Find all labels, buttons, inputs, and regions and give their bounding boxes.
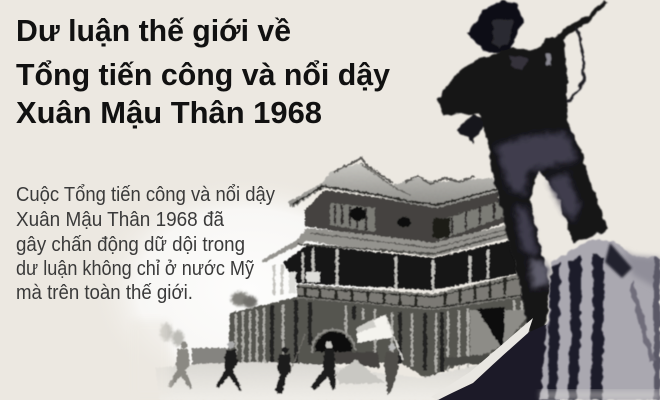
- balustrade: [297, 274, 523, 310]
- fade of photo into background at left: [130, 320, 170, 400]
- shirt highlight: [510, 55, 528, 70]
- dark doorway on right: [477, 307, 505, 350]
- distant trees: [160, 292, 257, 346]
- light opening between columns: [289, 272, 320, 293]
- soldier 4: [311, 342, 336, 390]
- soldier statue: [438, 0, 608, 347]
- ground: [155, 360, 500, 400]
- central arched gate: [315, 332, 352, 352]
- rifle stock: [457, 113, 487, 142]
- photo: Ngo Mon palace gate: [155, 158, 533, 400]
- intro paragraph: gây chấn động dữ dội trong: [16, 233, 245, 256]
- soldier 5: [384, 344, 399, 394]
- low wall at left: [192, 348, 232, 366]
- title: [16, 13, 391, 130]
- palace wall: [228, 297, 533, 378]
- rifle sling: [560, 27, 584, 104]
- sandbag barricade: [333, 352, 380, 368]
- rifle: [550, 0, 607, 46]
- title: Xuân Mậu Thân 1968: [16, 95, 322, 130]
- round windows: [350, 207, 366, 221]
- soldier 3: [275, 334, 305, 394]
- bottom shading: [540, 390, 660, 400]
- intro paragraph: Xuân Mậu Thân 1968 đã: [16, 208, 225, 231]
- trouser highlights: [496, 132, 580, 288]
- dark base: [437, 322, 560, 400]
- draped stone: [540, 238, 660, 400]
- sky glow behind palace: [90, 175, 410, 400]
- mottled shading on stone: [622, 250, 660, 290]
- dark stripes: [548, 252, 660, 400]
- light mound: [335, 360, 385, 384]
- intro paragraph: [16, 183, 276, 304]
- soldier 2: [216, 342, 242, 391]
- stone pedestal with draped stripes: [431, 238, 660, 400]
- upper floor: [305, 190, 507, 246]
- flag with pole: [357, 315, 403, 360]
- title: Dư luận thế giới về: [16, 13, 291, 48]
- columns: [274, 248, 518, 295]
- light curled edge: [431, 318, 533, 400]
- helmet and head: [467, 0, 523, 52]
- intro paragraph: Cuộc Tổng tiến công và nổi dậy: [16, 183, 276, 206]
- intro paragraph: mà trên toàn thế giới.: [16, 281, 193, 304]
- middle tiled roof: [262, 224, 513, 263]
- upper roof: [288, 163, 497, 208]
- body and legs: [438, 37, 608, 347]
- lower floor interior: [283, 240, 520, 290]
- intro paragraph: dư luận không chỉ ở nước Mỹ: [16, 257, 255, 280]
- soldier 1: [168, 342, 193, 389]
- running soldiers: [168, 334, 399, 394]
- title: Tổng tiến công và nổi dậy: [16, 57, 391, 92]
